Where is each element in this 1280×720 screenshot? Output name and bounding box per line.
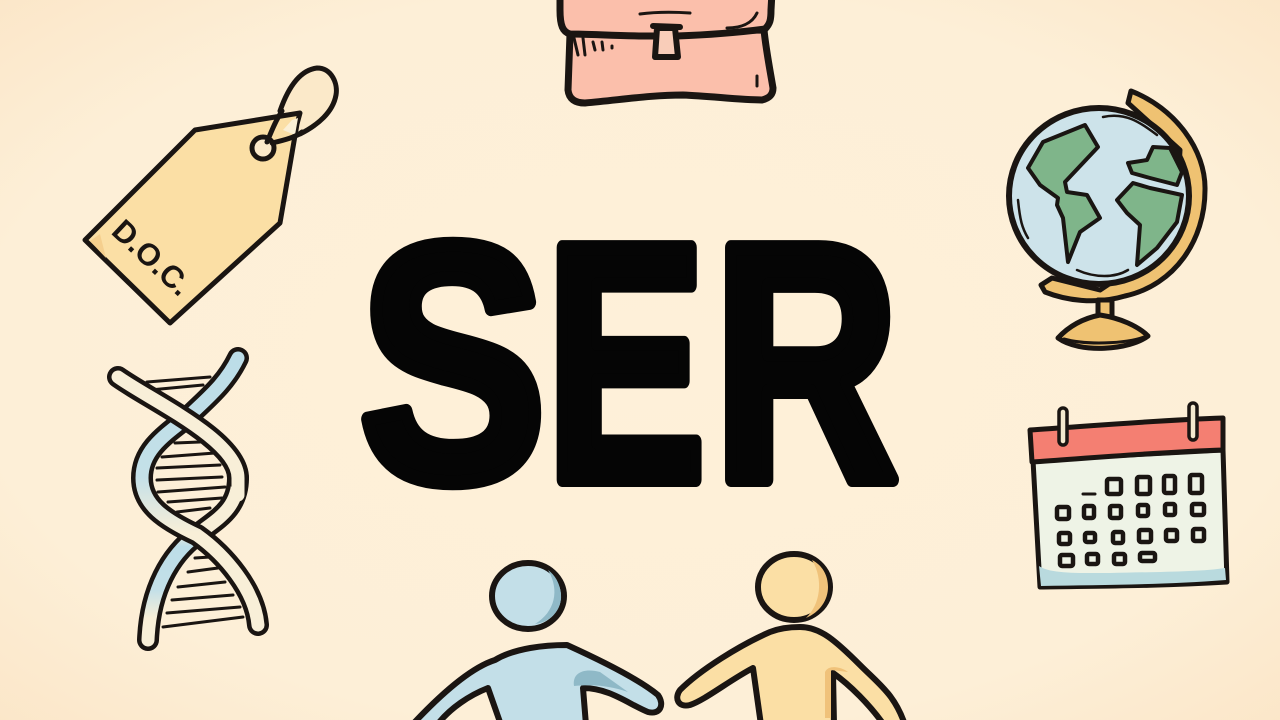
person: blue <box>412 563 661 720</box>
title: SER: E <box>546 174 706 551</box>
icon: briefcase <box>560 0 773 103</box>
icon: globe <box>1009 91 1205 348</box>
person: yellow <box>677 554 905 720</box>
title: SER: S <box>359 175 546 551</box>
rungs <box>147 377 243 627</box>
title: SER: R <box>714 175 899 552</box>
title: SER <box>359 174 899 552</box>
icon: DNA helix <box>118 358 258 640</box>
icon: two people <box>412 554 905 720</box>
icon: calendar <box>1030 403 1227 587</box>
icon: price tag D.O.C. <box>85 68 336 323</box>
tag text: D.O.C. <box>105 213 198 303</box>
calendar day cells <box>1057 475 1204 566</box>
